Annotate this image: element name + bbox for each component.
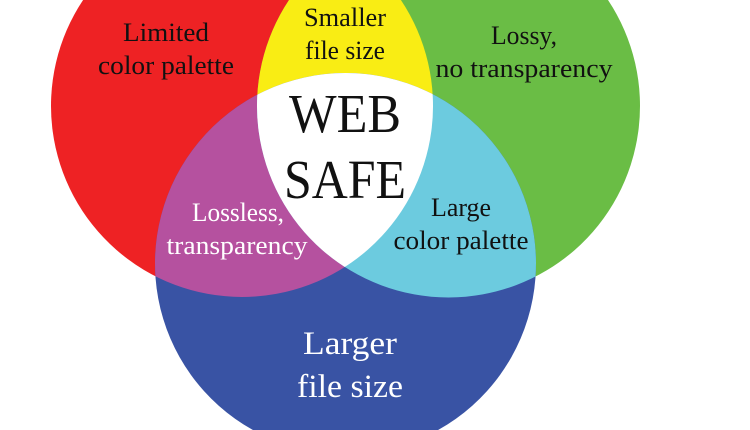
label: large color palette xyxy=(394,193,528,255)
label: large color palette: color palette xyxy=(394,226,528,255)
label: larger file size xyxy=(297,326,403,405)
label: larger file size: file size xyxy=(297,369,403,405)
circle: red xyxy=(51,0,433,297)
venn diagram xyxy=(51,0,640,430)
label: smaller file size: Smaller xyxy=(304,3,386,32)
label: large color palette: Large xyxy=(431,193,491,222)
label: lossless, transparency: Lossless, xyxy=(192,198,284,227)
overlap: white center xyxy=(257,73,433,267)
overlap: purple xyxy=(155,73,432,297)
label: limited color palette: color palette xyxy=(98,51,234,80)
circle: green xyxy=(257,0,640,297)
overlap: cyan xyxy=(257,73,536,298)
label: lossless, transparency xyxy=(166,198,308,260)
label: web safe: SAFE xyxy=(284,149,406,210)
label: web safe: WEB xyxy=(289,83,401,144)
label: lossy, no transparency xyxy=(436,21,612,83)
label: lossy, no transparency: Lossy, xyxy=(491,21,557,50)
label: larger file size: Larger xyxy=(303,326,397,362)
label: web safe xyxy=(284,83,406,210)
label: smaller file size: file size xyxy=(305,36,385,65)
overlap: yellow xyxy=(257,0,433,95)
label: limited color palette xyxy=(98,18,234,80)
label: limited color palette: Limited xyxy=(123,18,209,47)
circle: blue xyxy=(155,73,536,430)
label: smaller file size xyxy=(304,3,386,65)
label: lossy, no transparency: no transparency xyxy=(436,54,612,83)
label: lossless, transparency: transparency xyxy=(166,231,308,260)
